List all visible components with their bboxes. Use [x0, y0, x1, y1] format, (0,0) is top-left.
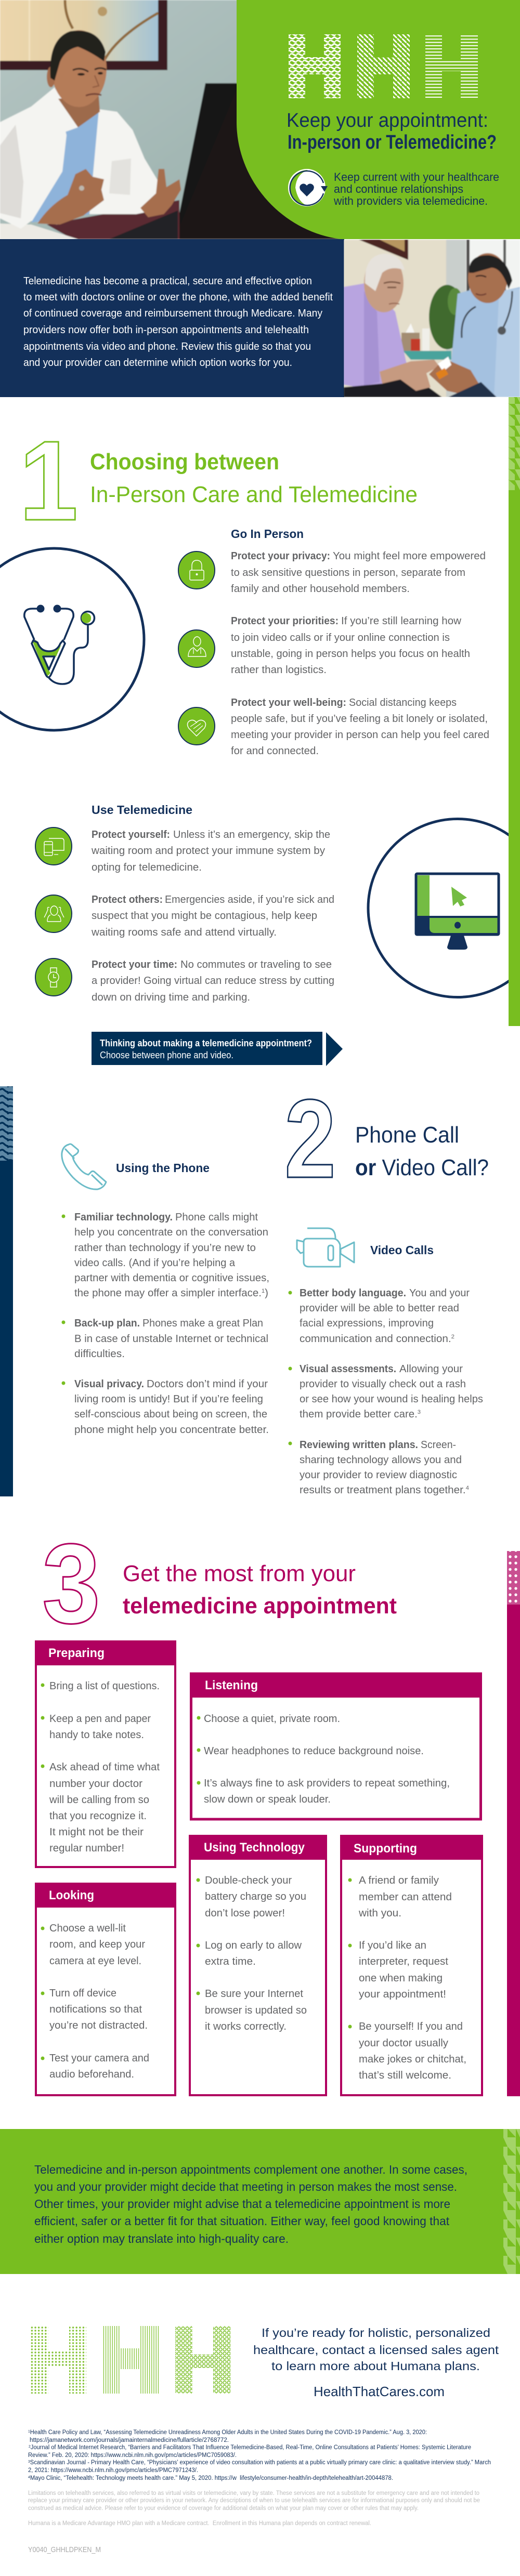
list: video benefits: facial expressions, improving — [300, 1318, 434, 1329]
list: phone benefits: B in case of unstable Internet or technical — [74, 1333, 268, 1345]
list: phone benefits: Phones make a great Plan — [142, 1318, 263, 1329]
panel: looking: audio beforehand. — [49, 2069, 134, 2080]
callout: thinking about making a telemedicine appointment: Choose between phone and video. — [100, 1050, 233, 1060]
icon: handshake heart — [178, 707, 215, 745]
subheading: Video Calls — [370, 1243, 434, 1257]
call to action — [253, 2326, 499, 2399]
panel: using technology: battery charge so you — [205, 1891, 306, 1902]
conclusion band: Telemedicine and in-person appointments complement one another. In some cases, — [34, 2163, 467, 2176]
panel: listening: Wear headphones to reduce background noise. — [204, 1745, 424, 1757]
panel: supporting: Be yourself! If you and — [359, 2021, 463, 2032]
intro panel: navy text band: of continued coverage and reimbursement through Medicare. Many — [23, 307, 323, 319]
callout: thinking about making a telemedicine appointment: Thinking about making a telemedicine appointment? — [100, 1038, 312, 1048]
list: phone benefits: phone might help you concentrate better. — [74, 1424, 269, 1436]
text: priorities: Protect your priorities: — [231, 615, 339, 627]
list: phone benefits: Familiar technology. — [74, 1212, 173, 1223]
call to action: healthcare, contact a licensed sales agent — [253, 2343, 499, 2357]
heading text — [123, 1561, 397, 1619]
panel: looking: Turn off device — [49, 1988, 116, 1999]
section 1 heading — [19, 418, 418, 544]
numeral 3: 3 — [42, 1521, 100, 1647]
intro panel: navy text band: to meet with doctors online or over the phone, with the added benefit — [23, 291, 333, 303]
heading text: In-Person Care and Telemedicine — [90, 482, 418, 507]
decorative side strip: green — [509, 397, 520, 1026]
call to action: HealthThatCares.com — [314, 2384, 445, 2399]
subheading: Use Telemedicine — [92, 803, 192, 817]
panel: video calls — [288, 1228, 483, 1496]
intro sentence — [333, 170, 499, 207]
references: 2 — [29, 2445, 31, 2449]
text: protect your time: down on driving time and parking. — [92, 992, 250, 1003]
list: video benefits: Visual assessments. — [300, 1363, 396, 1375]
panel: listening — [190, 1673, 482, 1819]
panel: preparing: number your doctor — [49, 1778, 142, 1790]
text: priorities: to join video calls or if your online connection is — [231, 632, 450, 643]
panel: using technology: extra time. — [205, 1956, 256, 1967]
panel: looking: you’re not distracted. — [49, 2020, 148, 2031]
references: Health Care Policy and Law, “Assessing Telemedicine Unreadiness Among Older Adults in the United States During the COVID-19 Pandemic.” Aug. 3, 2020: — [30, 2429, 427, 2436]
conclusion band: efficient, safer or a better fit for that situation. Either way, feel good knowing that — [34, 2214, 450, 2228]
references: Journal of Medical Internet Research, “Barriers and Facilitators That Influence Telemedicine-Based, Real-Time, Online Consultations at Patients’ Homes: Systemic Literature — [31, 2444, 471, 2451]
list: video benefits: 3 — [418, 1409, 421, 1415]
text: well-being: people safe, but if you’ve feeling a bit lonely or isolated, — [231, 713, 488, 725]
list: video benefits: Reviewing written plans. — [300, 1439, 418, 1451]
title — [287, 110, 497, 153]
panel: go in person — [178, 527, 489, 757]
panel: supporting: one when making — [359, 1973, 443, 1984]
list: video benefits: or see how your wound is healing helps — [300, 1394, 483, 1405]
heading text — [90, 449, 418, 507]
section 3 heading — [42, 1521, 397, 1647]
list: phone benefits: living room is untidy! But if you’re feeling — [74, 1394, 263, 1405]
panel: listening: slow down or speak louder. — [204, 1794, 331, 1805]
conclusion band — [0, 2129, 520, 2274]
disclaimer: replace your primary care provider or other providers in your network. Any descriptions of when to use telehealth services are for informational purposes only and should not be — [28, 2498, 480, 2504]
panel: looking: camera at eye level. — [49, 1955, 141, 1967]
text: protect others — [91, 894, 334, 938]
list: video benefits — [288, 1287, 483, 1496]
text: protect yourself: Unless it’s an emergency, skip the — [173, 829, 330, 840]
callout: thinking about making a telemedicine appointment — [92, 1032, 343, 1066]
text: protect yourself: waiting room and protect your immune system by — [91, 845, 325, 857]
numeral 1: 1 — [19, 418, 78, 544]
icon: lock — [178, 551, 215, 589]
panel: preparing: will be calling from so — [49, 1794, 149, 1806]
list: phone benefits: Visual privacy. — [74, 1378, 144, 1390]
heading text: Get the most from your — [123, 1561, 356, 1586]
references: 2, 2021: https://www.ncbi.nlm.nih.gov/pmc/articles/PMC7971243/. — [28, 2467, 198, 2474]
panel: looking: room, and keep your — [49, 1939, 145, 1950]
references: Mayo Clinic, “Telehealth: Technology meets health care.” May 5, 2020. https://w lifestyle/consumer-health/in-depth/telehealth/art-20044878. — [30, 2475, 393, 2481]
intro panel: navy text band: Telemedicine has become a practical, secure and effective option — [23, 275, 312, 287]
list: video benefits: provider to visually check out a rash — [300, 1378, 466, 1390]
panel: using technology: it works correctly. — [205, 2021, 287, 2032]
panel: supporting: A friend or family — [359, 1875, 439, 1886]
references: https://jamanetwork.com/journals/jamainternalmedicine/fullarticle/2768772. — [30, 2437, 229, 2443]
icon: phone handset — [62, 1144, 106, 1189]
list: video benefits: You and your — [409, 1287, 470, 1299]
text: protect your time: Protect your time: — [92, 959, 177, 970]
list: phone benefits: partner with dementia or cognitive issues, — [74, 1272, 269, 1284]
panel: using technology: browser is updated so — [205, 2005, 307, 2016]
list: video benefits: sharing technology allows you and — [300, 1454, 462, 1466]
list: phone benefits: video calls. (And if you’re helping a — [74, 1257, 236, 1269]
conclusion band: either option may translate into high-quality care. — [34, 2232, 289, 2245]
icon: watch — [35, 958, 72, 996]
decorative side strip: navy — [0, 1086, 13, 1496]
panel: using the phone — [61, 1144, 269, 1436]
illustration: computer monitor in circle — [368, 819, 520, 997]
text: protect yourself: opting for telemedicine. — [92, 862, 202, 873]
panel: listening: Listening — [205, 1678, 258, 1692]
text: protect yourself — [91, 829, 330, 873]
icon: doctor — [178, 630, 215, 667]
heading text: telemedicine appointment — [123, 1593, 397, 1619]
list: phone benefits: Doctors don’t mind if your — [147, 1378, 268, 1390]
panel: looking — [35, 1883, 176, 2095]
conclusion band: Other times, your provider might advise that a telemedicine appointment is more — [34, 2197, 450, 2211]
icon: devices — [35, 827, 72, 865]
text: priorities: If you’re still learning how — [341, 615, 462, 627]
panel: preparing: Keep a pen and paper — [49, 1713, 151, 1725]
illustration: stethoscope in circle — [0, 548, 144, 730]
numeral 2: 2 — [284, 1076, 336, 1201]
list: phone benefits: ) — [265, 1287, 268, 1299]
text: protect your time: a provider! Going virtual can reduce stress by cutting — [92, 975, 334, 987]
panel: looking: notifications so that — [49, 2004, 142, 2015]
panel: supporting: make jokes or chitchat, — [359, 2054, 466, 2065]
panel: preparing: regular number! — [49, 1843, 124, 1854]
intro sentence: Keep current with your healthcare — [334, 170, 499, 183]
panel: looking: Looking — [49, 1888, 94, 1902]
text: well-being: Protect your well-being: — [231, 697, 346, 708]
panel: supporting: member can attend — [359, 1891, 452, 1903]
icon: video camera — [297, 1228, 354, 1267]
text: protect your time — [92, 959, 334, 1003]
panel: use telemedicine — [35, 803, 334, 1003]
text: privacy: family and other household members. — [231, 583, 410, 595]
text: protect others: suspect that you might be contagious, help keep — [92, 910, 317, 922]
logo pattern: HHH — [289, 34, 478, 98]
heading text — [355, 1122, 489, 1180]
panel: supporting: your doctor usually — [359, 2038, 448, 2049]
list: phone benefits: 1 — [262, 1288, 265, 1294]
panel: using technology: Log on early to allow — [205, 1940, 302, 1951]
panel: preparing: that you recognize it. — [49, 1810, 147, 1822]
intro sentence: and continue relationships — [334, 182, 463, 195]
panel: supporting: with you. — [358, 1908, 401, 1919]
list: phone benefits: Phone calls might — [175, 1212, 258, 1223]
panel: preparing — [35, 1640, 176, 1867]
list: video benefits: provider will be able to better read — [300, 1303, 459, 1314]
disclaimer: construed as medical advice. Please refer to your evidence of coverage for additional details on what your plan may cover or other rules that may apply. — [28, 2505, 419, 2512]
list: video benefits: Allowing your — [399, 1363, 463, 1375]
references: 3 — [28, 2460, 30, 2464]
references — [28, 2429, 491, 2481]
heading text: Choosing between — [90, 449, 279, 475]
disclaimer: Humana is a Medicare Advantage HMO plan with a Medicare contract. Enrollment in this Humana plan depends on contract renewal. — [28, 2520, 371, 2527]
list: video benefits: your provider to review diagnostic — [300, 1469, 457, 1481]
title: Keep your appointment: — [287, 110, 488, 132]
panel: supporting: your appointment! — [359, 1989, 446, 2000]
list: phone benefits: help you concentrate on the conversation — [74, 1227, 268, 1238]
panel: supporting: Supporting — [354, 1842, 417, 1856]
panel: supporting: that’s still welcome. — [359, 2070, 451, 2081]
panel: supporting: If you’d like an — [359, 1940, 426, 1951]
hero green panel — [237, 0, 520, 239]
panel: preparing: Preparing — [48, 1646, 105, 1660]
list: video benefits: Better body language. — [300, 1287, 406, 1299]
text: protect others: Emergencies aside, if you’re sick and — [165, 894, 334, 905]
list: phone benefits: self-conscious about being on screen, the — [74, 1409, 267, 1420]
panel: preparing: Bring a list of questions. — [49, 1680, 160, 1692]
text: privacy: Protect your privacy: — [231, 550, 330, 562]
list: video benefits: results or treatment plans together. — [300, 1484, 460, 1496]
list: phone benefits: the phone may offer a simpler interface. — [74, 1287, 257, 1299]
document code: Y0040_GHHLDPKEN_M — [28, 2545, 101, 2554]
list: phone benefits: Back-up plan. — [74, 1318, 140, 1329]
heading text: or Video Call? — [355, 1155, 489, 1180]
references: Review.” Feb. 20, 2020: https://www.ncbi.nlm.nih.gov/pmc/articles/PMC7059083/. — [28, 2452, 237, 2459]
panel: looking: Choose a well-lit — [49, 1923, 126, 1934]
subheading: Go In Person — [231, 527, 304, 541]
section 2 heading — [284, 1076, 489, 1201]
text: well-being: Social distancing keeps — [349, 697, 457, 708]
list: video benefits: communication and connection. — [300, 1333, 446, 1345]
list: video benefits: them provide better care. — [300, 1409, 415, 1420]
panel: preparing: handy to take notes. — [49, 1729, 144, 1741]
intro panel: navy text band: providers now offer both in-person appointments and telehealth — [23, 324, 309, 336]
panel: using technology: Be sure your Internet — [205, 1988, 303, 2000]
text: priorities: rather than logistics. — [231, 664, 327, 676]
intro sentence: with providers via telemedicine. — [333, 194, 488, 207]
text: priorities — [231, 615, 470, 676]
list: phone benefits — [61, 1212, 269, 1436]
conclusion band: you and your provider might decide that meeting in person makes the most sense. — [34, 2180, 457, 2193]
list: phone benefits: rather than technology if you’re new to — [74, 1242, 256, 1254]
panel: using technology — [189, 1835, 327, 2095]
text: protect your time: No commutes or traveling to see — [180, 959, 332, 970]
icon: heart in refresh circle — [288, 169, 328, 206]
text: priorities: unstable, going in person helps you focus on health — [231, 648, 470, 660]
intro panel: navy text band: appointments via video and phone. Review this guide so that you — [23, 340, 311, 352]
text: privacy: You might feel more empowered — [333, 550, 486, 562]
logo pattern: outlined HHH — [31, 2326, 230, 2394]
disclaimer — [28, 2490, 480, 2527]
panel: using technology: Double-check your — [205, 1875, 292, 1886]
text: privacy: to ask sensitive questions in person, separate from — [231, 567, 465, 579]
arrow — [326, 1032, 343, 1066]
list: video benefits: 4 — [466, 1485, 469, 1491]
text: protect others: Protect others: — [92, 894, 163, 905]
references: 1 — [28, 2430, 30, 2434]
panel: preparing: It might not be their — [49, 1826, 144, 1838]
text: well-being: meeting your provider in person can help you feel cared — [231, 729, 489, 741]
subheading: Using the Phone — [116, 1161, 210, 1175]
panel: listening: Choose a quiet, private room. — [204, 1713, 340, 1725]
text: protect yourself: Protect yourself: — [92, 829, 170, 840]
icon: people — [35, 895, 72, 932]
references: 4 — [28, 2476, 30, 2479]
panel: supporting: interpreter, request — [359, 1956, 448, 1967]
hero photo: doctor at desk — [0, 0, 343, 239]
text: well-being: for and connected. — [231, 745, 319, 757]
text: privacy — [231, 550, 486, 595]
intro panel: navy text band: and your provider can determine which option works for you. — [23, 357, 292, 369]
panel: using technology: Using Technology — [204, 1841, 305, 1855]
references: Scandinavian Journal - Primary Health Care, “Physicians’ experience of video consultation with patients at a public virtually primary care clinic: a qualitative interview study.” March — [30, 2460, 491, 2466]
disclaimer: Limitations on telehealth services, also referred to as virtual visits or telemedicine, vary by state. These services are not a substitute for emergency care and are not intended to — [28, 2490, 479, 2496]
panel: using technology: don’t lose power! — [205, 1908, 285, 1919]
panel: supporting — [340, 1835, 483, 2095]
panel: looking: Test your camera and — [49, 2053, 149, 2064]
photo: doctor reviewing medication with older patient — [344, 240, 520, 397]
list: video benefits: Screen- — [421, 1439, 456, 1451]
decorative side strip: magenta — [507, 1551, 520, 2096]
panel: preparing: Ask ahead of time what — [49, 1762, 160, 1773]
text: protect others: waiting rooms safe and attend virtually. — [91, 927, 277, 938]
heading text: Phone Call — [355, 1122, 459, 1148]
text: well-being — [231, 697, 489, 757]
intro panel: navy text band — [0, 239, 344, 397]
list: phone benefits: difficulties. — [74, 1348, 125, 1360]
panel: listening: It’s always fine to ask providers to repeat something, — [204, 1778, 450, 1789]
list: video benefits: 2 — [451, 1334, 454, 1340]
call to action: to learn more about Humana plans. — [271, 2359, 480, 2373]
call to action: If you’re ready for holistic, personalized — [262, 2326, 490, 2340]
